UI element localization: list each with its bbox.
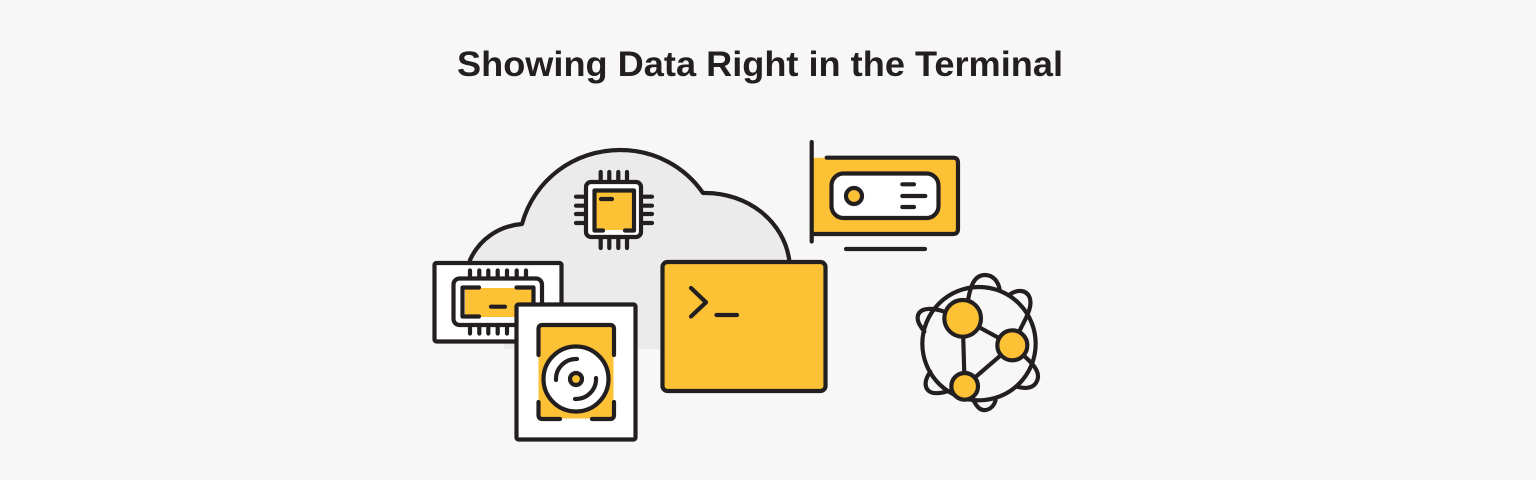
cloud xyxy=(470,150,790,349)
icon: terminal window xyxy=(662,262,826,391)
title: Showing Data Right in the Terminal xyxy=(457,44,1063,84)
icon: cpu chip in cloud xyxy=(576,172,652,248)
icon: network globe xyxy=(918,275,1038,410)
icon: memory chip card xyxy=(434,263,562,342)
icon: graphics card xyxy=(812,142,958,249)
icon: hard disk card xyxy=(516,304,636,440)
